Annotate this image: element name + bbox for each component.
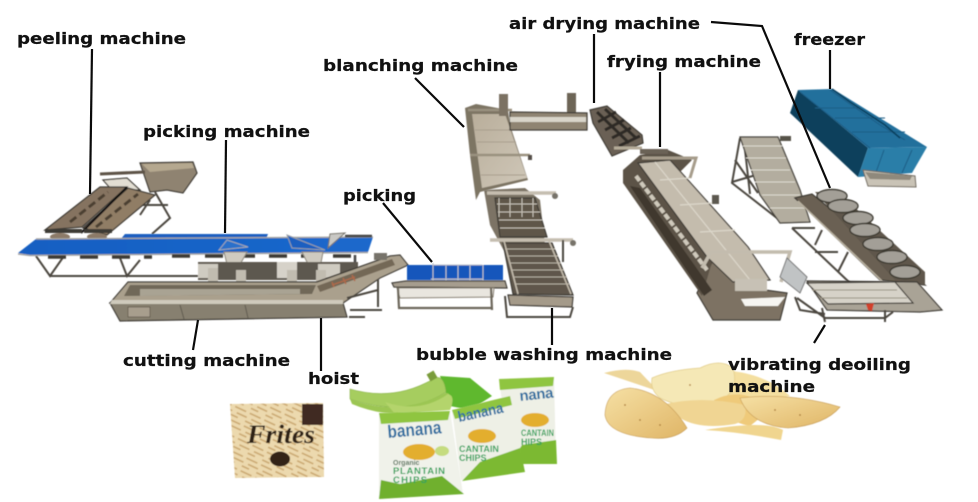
bag: back right: CANTAIN [521, 428, 554, 438]
bag: middle: CHIPS [459, 453, 487, 463]
machine: peeling machine [45, 162, 197, 241]
bag: middle: banana [456, 400, 505, 426]
bag: front: Organic [393, 460, 420, 467]
label: freezer: freezer [794, 30, 865, 49]
labels [17, 14, 911, 396]
label: hoist: hoist [308, 369, 359, 388]
machine: vibrating deoiling machine [795, 281, 942, 322]
machine: bubble washing machine [484, 188, 576, 317]
label: peeling machine: peeling machine [17, 29, 186, 48]
label: vibrating deoiling machine: machine [728, 377, 815, 396]
machine: picking table [392, 263, 507, 310]
product: frites bag: Frites [246, 420, 315, 449]
machine: inclined conveyor [732, 136, 810, 223]
label: cutting machine: cutting machine [123, 351, 290, 370]
machine: vibrating hopper line with seven pots [792, 190, 925, 285]
machine: picking machine conveyor [18, 233, 373, 284]
bag: middle [452, 396, 525, 481]
label: picking machine: picking machine [143, 122, 310, 141]
machine: freezer [790, 89, 927, 187]
bag: back right: nana [519, 384, 555, 405]
machine: air drying machine [590, 106, 643, 156]
product: plantain chips pile [604, 363, 840, 440]
bag: front [379, 411, 464, 499]
label: bubble washing machine: bubble washing machine [416, 345, 672, 364]
bag: front: CHIPS [393, 475, 427, 486]
bag: back right [499, 377, 557, 464]
bag: front: banana [387, 417, 443, 442]
leader lines [90, 22, 830, 371]
product: plantain chip bags [379, 377, 557, 499]
label: air drying machine: air drying machine [509, 14, 700, 33]
bag: front: PLANTAIN [393, 466, 445, 477]
label: frying machine: frying machine [607, 52, 761, 71]
label: vibrating deoiling machine: vibrating deoiling [728, 355, 911, 374]
product: green bananas [350, 371, 492, 414]
bag: middle: CANTAIN [459, 444, 499, 454]
label: picking: picking [343, 186, 416, 205]
machine: cutting machine and hoist [110, 253, 408, 321]
machine: frying machine [623, 149, 807, 320]
bag: back right: HIPS [521, 437, 542, 447]
product: frites bag [230, 403, 324, 478]
machine: blanching machine and air dryer conveyor [465, 93, 587, 200]
label: blanching machine: blanching machine [323, 56, 518, 75]
